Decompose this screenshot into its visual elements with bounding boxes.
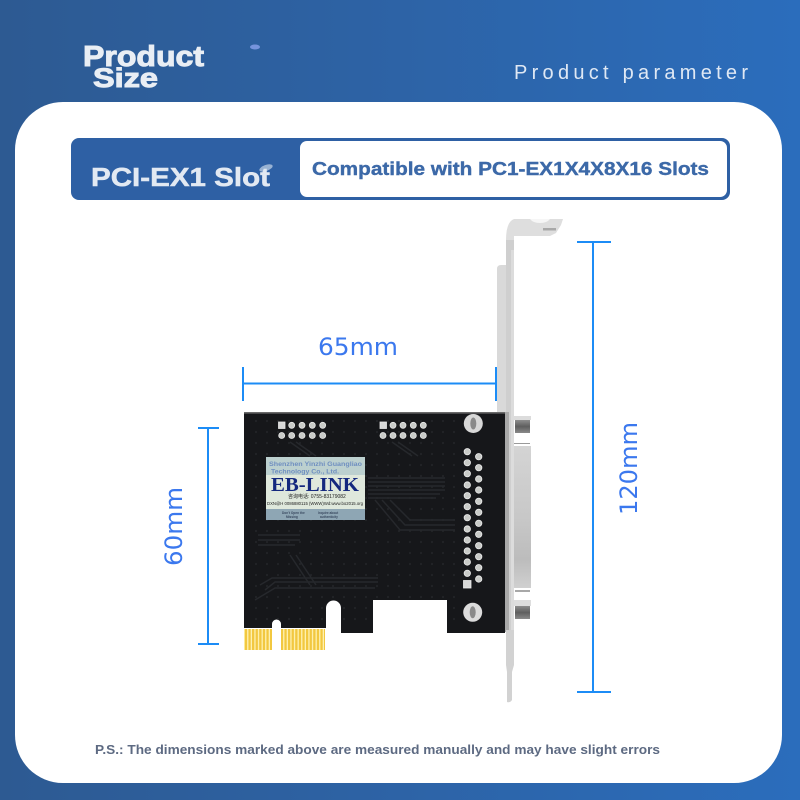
- bracket vertical: [506, 240, 514, 633]
- header holes top middle: [380, 422, 426, 438]
- circuit board: [244, 412, 505, 650]
- mounting screw bottom: [463, 603, 482, 622]
- bracket rear strip: [497, 265, 506, 412]
- dimension: 65mm: 65mm: [318, 333, 398, 361]
- gold fingers right: [281, 629, 325, 650]
- compatibility text: Compatible with PC1-EX1X4X8X16 Slots: [312, 158, 709, 179]
- brand sticker: Missing: [286, 515, 298, 519]
- parallel port pins: [464, 448, 482, 588]
- bracket lower end: [506, 630, 514, 702]
- decorative glint: [250, 44, 260, 50]
- connector shell: [514, 446, 531, 588]
- board traces: [255, 442, 455, 600]
- header holes top left: [278, 422, 326, 438]
- brand sticker: Don't Open the: [282, 511, 305, 515]
- label glint: [258, 163, 274, 173]
- brand sticker: Technology Co., Ltd.: [271, 468, 339, 476]
- header bar: [71, 138, 730, 200]
- brand sticker: authenticity: [320, 515, 338, 519]
- brand sticker: EB-LINK: [271, 475, 360, 496]
- connector bottom screw: [514, 600, 531, 606]
- title: Product Size: [83, 41, 204, 93]
- title: Product Size: Product: [83, 41, 204, 73]
- connector top screw: [514, 416, 531, 420]
- bracket top tab: [506, 219, 563, 250]
- board vias texture: [255, 420, 455, 620]
- board body: [244, 413, 505, 633]
- footnote: P.S.: The dimensions marked above are measured manually and may have slight errors: [95, 742, 660, 757]
- subtitle: Product parameter: Product parameter: [514, 62, 748, 84]
- inner white box: [300, 141, 727, 197]
- brand sticker: [266, 457, 365, 520]
- brand sticker: Shenzhen Yinzhi Guangliao: [269, 461, 362, 468]
- title: Product Size: Size: [93, 63, 158, 93]
- card bracket: [497, 219, 563, 702]
- mounting screw top: [464, 414, 483, 433]
- brand sticker: DXN@H 0086880115 (WWW)Wd:www.bo2015.org: [267, 501, 364, 506]
- brand sticker: 咨询电话: 0755-83179082: [288, 493, 346, 500]
- brand sticker: Inquire about: [318, 511, 339, 515]
- dimension: 60mm: 60mm: [160, 487, 188, 566]
- dimension: 120mm: 120mm: [615, 422, 643, 515]
- gold fingers left: [244, 629, 272, 650]
- slot label: PCI-EX1 Slot: [91, 162, 270, 192]
